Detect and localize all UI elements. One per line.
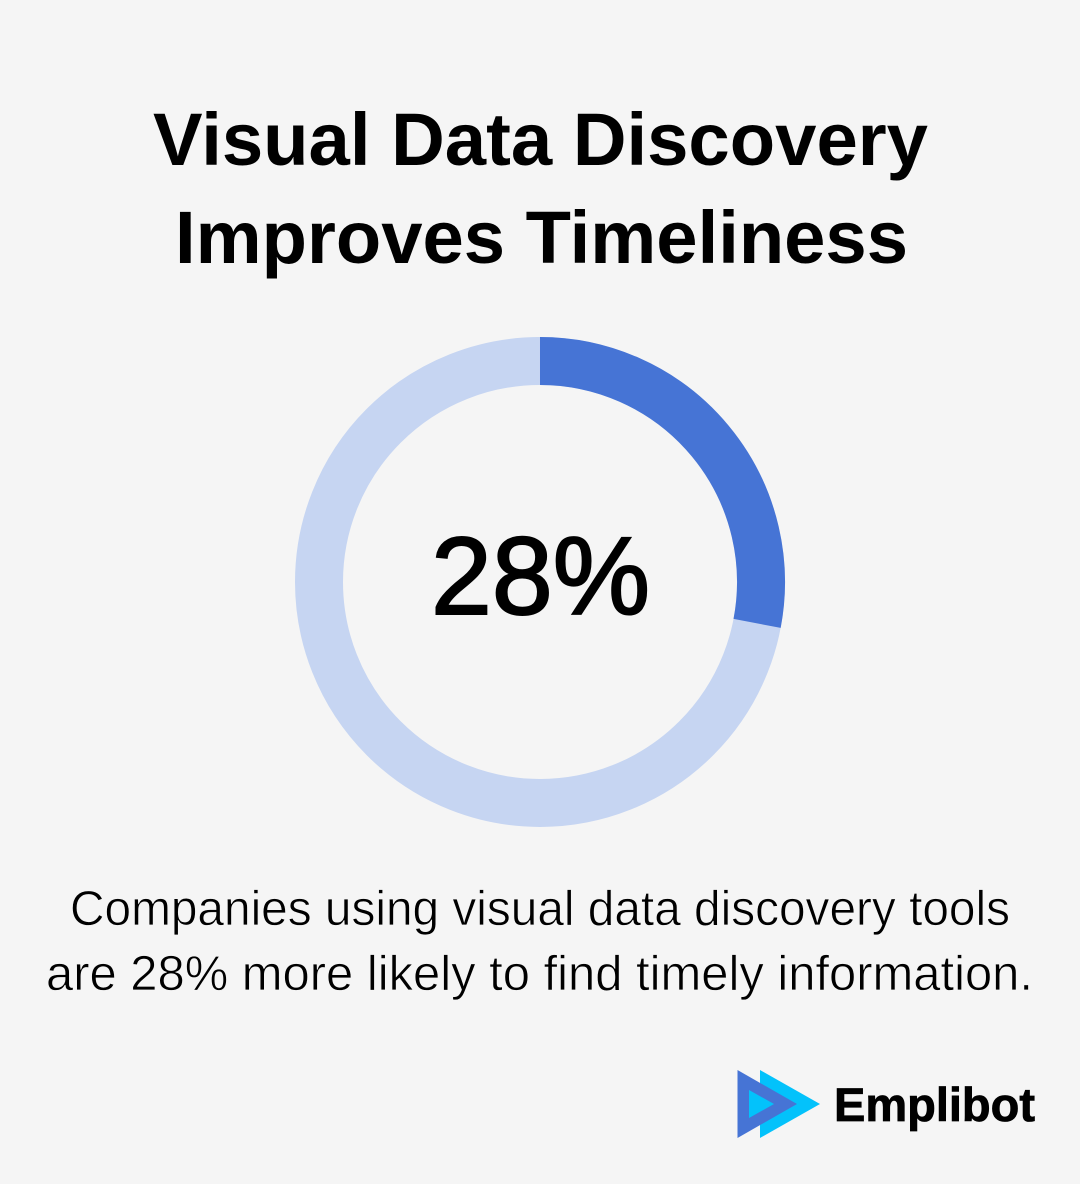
description text <box>46 882 1033 1001</box>
logo wordmark: Emplibot <box>834 1078 1035 1131</box>
title: Improves Timeliness <box>175 196 908 279</box>
logo: Emplibot <box>738 1070 1035 1138</box>
description text: Companies using visual data discovery tools <box>70 882 1010 936</box>
donut chart: 28% <box>319 361 761 803</box>
description text: are 28% more likely to find timely information. <box>46 947 1033 1001</box>
donut track <box>319 361 761 803</box>
title <box>153 98 928 279</box>
donut value arc <box>540 361 761 623</box>
center value: 28% <box>431 515 650 638</box>
title: Visual Data Discovery <box>153 98 928 181</box>
icon: play triangles <box>738 1070 820 1138</box>
